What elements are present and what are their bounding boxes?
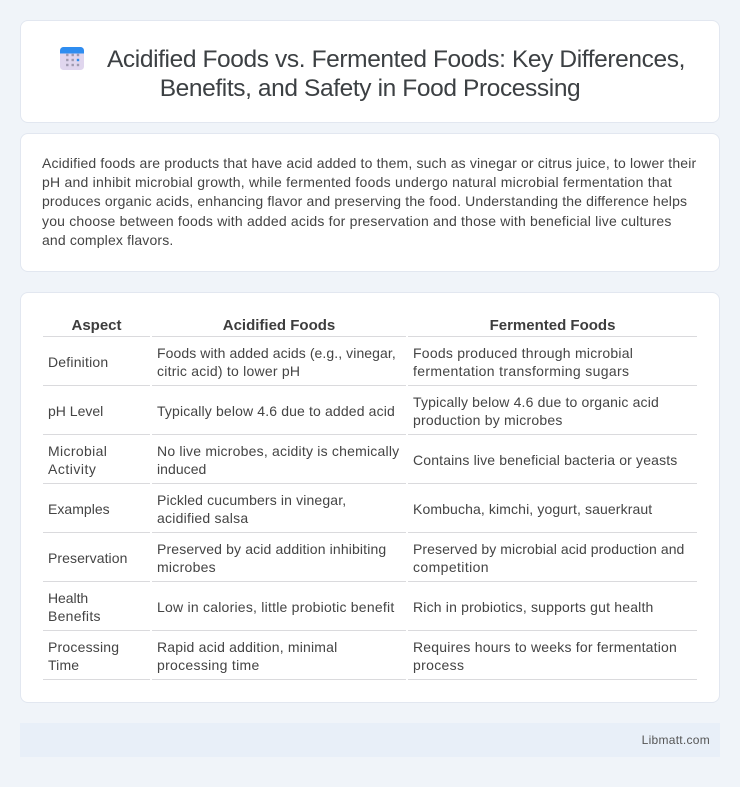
title: Acidified Foods vs. Fermented Foods: Key Differences,: [107, 46, 685, 73]
row: Processing Time: [48, 639, 677, 673]
intro text: produces organic acids, enhancing flavor and preserving the food. Understanding the difference helps: [42, 193, 687, 209]
row: Examples: [48, 492, 652, 526]
row: Definition: Foods with added acids (e.g., vinegar,: [157, 345, 396, 361]
row: Definition: citric acid) to lower pH: [157, 363, 300, 379]
row: Definition: fermentation transforming sugars: [413, 363, 629, 379]
row: Health Benefits: Benefits: [48, 608, 101, 624]
column heading: Aspect: Aspect: [71, 317, 122, 334]
row: Preservation: Preserved by microbial acid production and: [413, 541, 684, 557]
row: Definition: Definition: [48, 354, 108, 370]
column heading: Acidified Foods: Acidified Foods: [223, 317, 335, 334]
row: Preservation: [48, 541, 684, 575]
row: Microbial Activity: [48, 443, 677, 477]
row: Processing Time: process: [413, 657, 464, 673]
table card: [20, 292, 720, 703]
title: Benefits, and Safety in Food Processing: [160, 75, 580, 102]
column heading: Fermented Foods: Fermented Foods: [490, 317, 615, 334]
comparison table: [43, 317, 697, 680]
intro text: you choose between foods with added acids for preservation and those with beneficial live cultures: [42, 213, 672, 229]
row: Microbial Activity: No live microbes, acidity is chemically: [157, 443, 399, 459]
row: Microbial Activity: Activity: [48, 461, 96, 477]
row: pH Level: Typically below 4.6 due to organic acid: [413, 394, 659, 410]
row: Examples: Pickled cucumbers in vinegar,: [157, 492, 346, 508]
intro text: [42, 155, 696, 248]
row: pH Level: Typically below 4.6 due to added acid: [157, 403, 395, 419]
header card: [20, 20, 720, 123]
footer credit: Libmatt.com: [642, 733, 710, 747]
row: Health Benefits: Low in calories, little probiotic benefit: [157, 599, 394, 615]
row: Health Benefits: Health: [48, 590, 88, 606]
row: Health Benefits: [48, 590, 653, 624]
row: Processing Time: Rapid acid addition, minimal: [157, 639, 337, 655]
footer: [20, 723, 720, 757]
row: Processing Time: processing time: [157, 657, 260, 673]
intro text: Acidified foods are products that have acid added to them, such as vinegar or citrus juice, to lower their: [42, 155, 696, 171]
row: Examples: acidified salsa: [157, 510, 248, 526]
row: Processing Time: Requires hours to weeks for fermentation: [413, 639, 677, 655]
row: Definition: Foods produced through microbial: [413, 345, 633, 361]
row: Preservation: competition: [413, 559, 489, 575]
row: pH Level: [48, 394, 659, 428]
row: Examples: Examples: [48, 501, 110, 517]
row: Microbial Activity: Contains live beneficial bacteria or yeasts: [413, 452, 677, 468]
row: Processing Time: Time: [48, 657, 79, 673]
intro card: [20, 133, 720, 272]
title: [107, 46, 685, 102]
row: pH Level: pH Level: [48, 403, 103, 419]
row: Preservation: Preservation: [48, 550, 127, 566]
icon: calendar grid: [60, 47, 84, 70]
intro text: and complex flavors.: [42, 232, 173, 248]
row: Preservation: microbes: [157, 559, 216, 575]
row: pH Level: production by microbes: [413, 412, 563, 428]
row: Processing Time: Processing: [48, 639, 119, 655]
row: Examples: Kombucha, kimchi, yogurt, sauerkraut: [413, 501, 652, 517]
row: Definition: [48, 345, 633, 379]
row: Health Benefits: Rich in probiotics, supports gut health: [413, 599, 653, 615]
row: Microbial Activity: Microbial: [48, 443, 107, 459]
row: Preservation: Preserved by acid addition inhibiting: [157, 541, 386, 557]
row: Microbial Activity: induced: [157, 461, 206, 477]
intro text: pH and inhibit microbial growth, while fermented foods undergo natural microbial fermentation that: [42, 174, 672, 190]
